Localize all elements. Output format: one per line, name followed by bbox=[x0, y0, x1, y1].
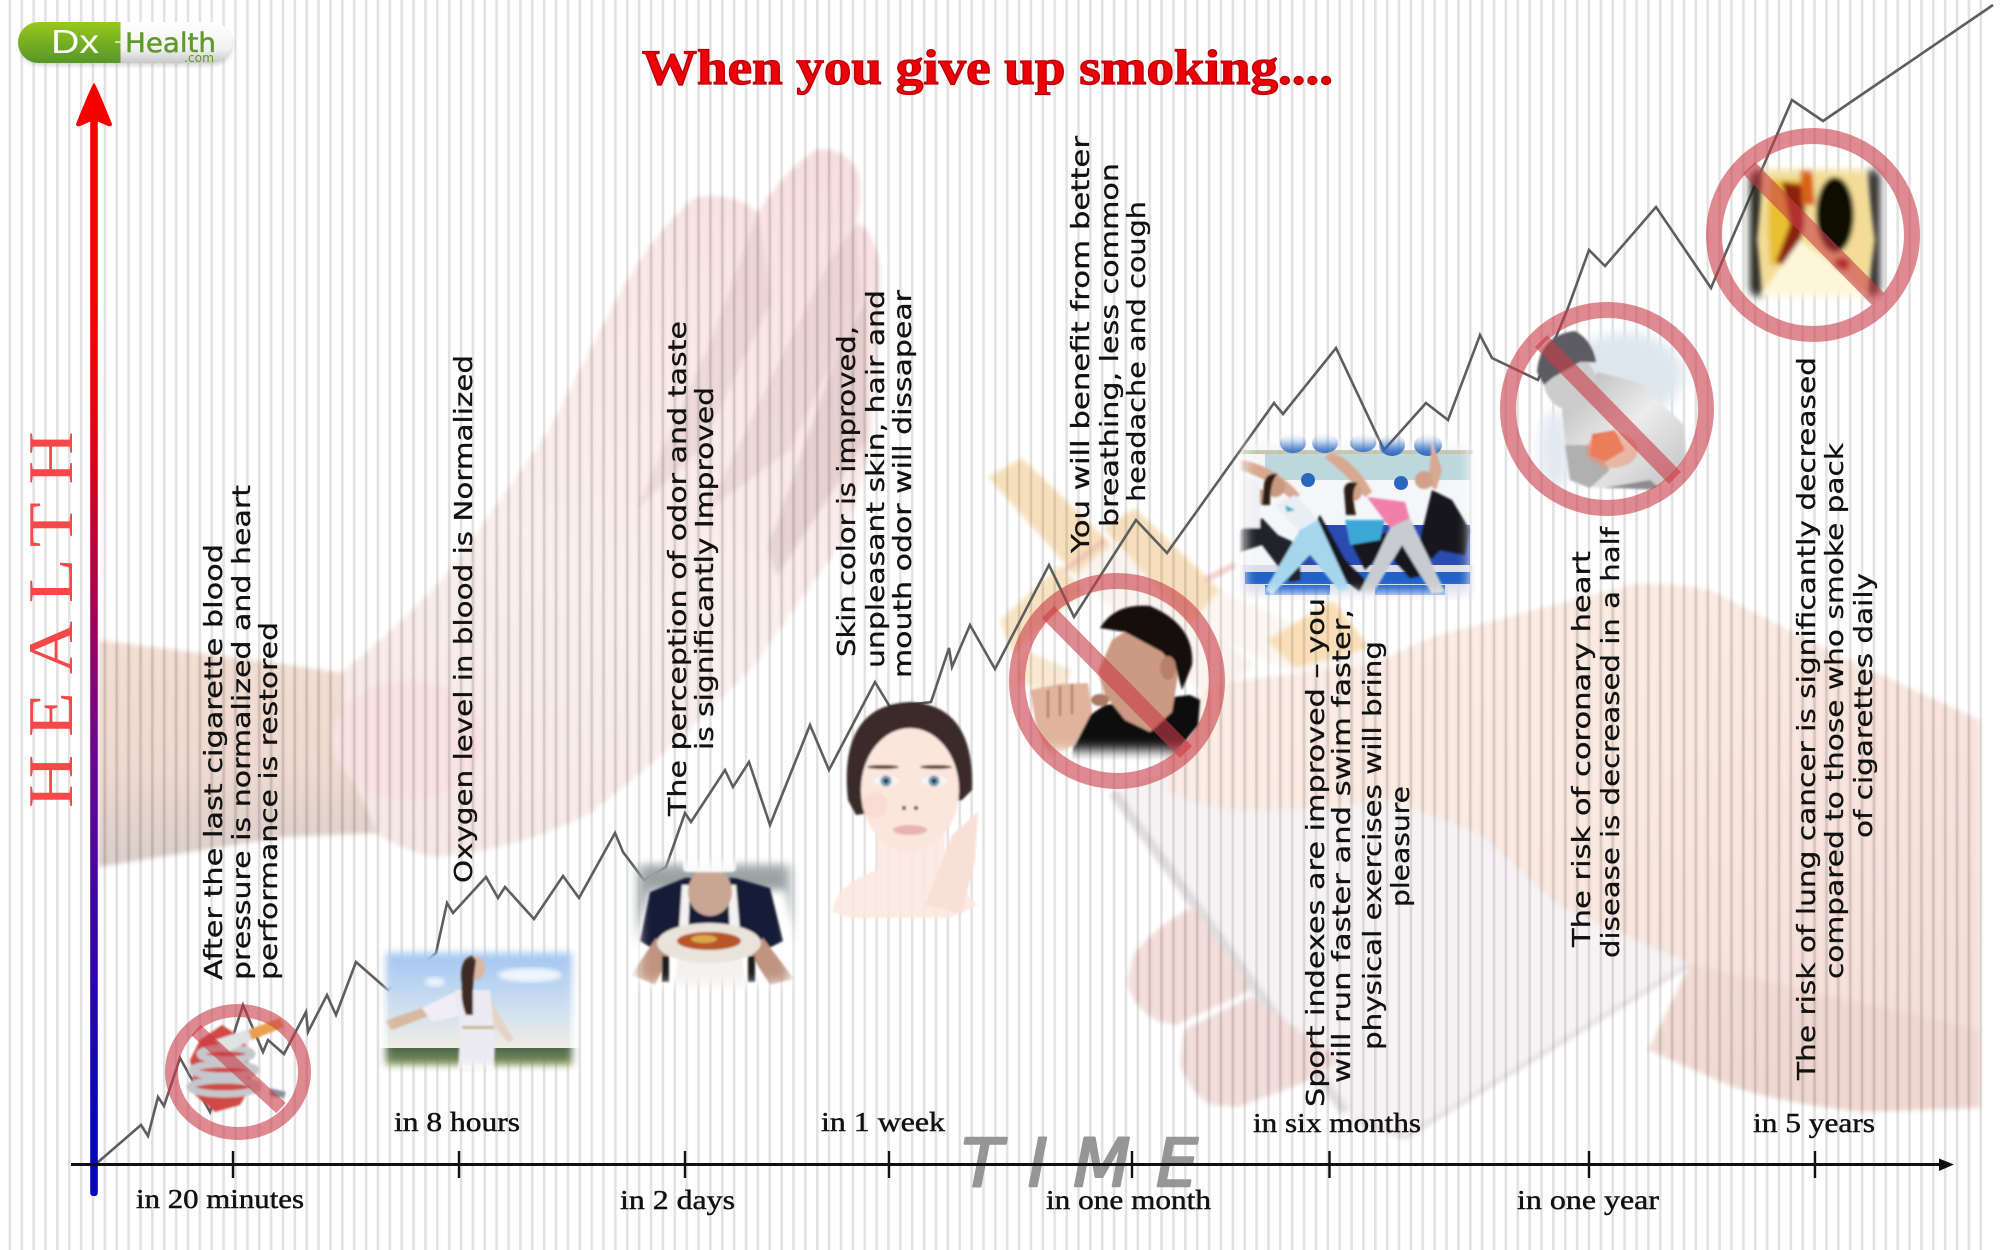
x-axis arrow with ticks bbox=[71, 1151, 1954, 1178]
text: in one year: The risk of coronary heart bbox=[1567, 551, 1596, 948]
text: in 5 years bbox=[1792, 357, 1878, 1081]
text: in six months: physical exercises will bring bbox=[1358, 641, 1387, 1050]
time labels: in 2 days bbox=[620, 1185, 735, 1215]
photo: group fitness class bbox=[1235, 435, 1474, 598]
text: in 2 days: is significantly Improved bbox=[690, 387, 719, 750]
time labels: in one month bbox=[1046, 1185, 1212, 1215]
background: hand holding cigarette pack bbox=[1113, 584, 1980, 1137]
time labels: in 1 week bbox=[821, 1107, 946, 1137]
text: in 5 years: The risk of lung cancer is significantly decreased bbox=[1792, 357, 1821, 1081]
photo: man coughing bbox=[1030, 606, 1200, 760]
text: in 8 hours: Oxygen level in blood is Normalized bbox=[449, 355, 478, 883]
text: in one month bbox=[1066, 135, 1151, 554]
photo: woman with healthy skin bbox=[832, 702, 978, 918]
text: in one month: You will benefit from better bbox=[1066, 135, 1095, 554]
logo: DxHealth: Health bbox=[125, 28, 216, 59]
time labels: in one year bbox=[1517, 1185, 1659, 1215]
photo: heart and lungs coiled by a cigarette bbox=[190, 1018, 286, 1112]
text: in 1 week: mouth odor will dissapear bbox=[888, 289, 917, 678]
background: crossed cigarettes bbox=[988, 458, 1375, 700]
y-axis label: HEALTH: HEALTH bbox=[15, 414, 86, 808]
text: in 1 week: Skin color is improved, bbox=[832, 326, 861, 657]
time labels: in 5 years bbox=[1753, 1108, 1875, 1138]
logo: DxHealth: .com bbox=[184, 51, 214, 65]
logo: DxHealth bbox=[18, 22, 232, 65]
text: in 20 minutes: After the last cigarette blood bbox=[199, 544, 228, 980]
text: in one month: headache and cough bbox=[1122, 201, 1151, 502]
text: in one month: breathing, less common bbox=[1095, 163, 1124, 527]
time labels: in six months bbox=[1253, 1108, 1421, 1138]
text: in six months: pleasure bbox=[1386, 786, 1415, 907]
text: in 1 week bbox=[832, 289, 917, 678]
prohibition ring: chest pain bbox=[1508, 310, 1706, 508]
text: in one year: disease is decreased in a half bbox=[1596, 526, 1625, 958]
text: in 5 years: of cigarettes daily bbox=[1849, 573, 1878, 838]
photo: diseased lungs x-ray bbox=[1744, 164, 1886, 302]
text: in 20 minutes: pressure is normalized and heart bbox=[227, 485, 256, 980]
time labels bbox=[136, 1107, 1875, 1215]
time labels: in 20 minutes bbox=[136, 1184, 304, 1214]
background: left hand bbox=[98, 149, 880, 867]
text: in six months bbox=[1301, 598, 1415, 1107]
prohibition ring: coughing bbox=[1017, 581, 1217, 781]
prohibition ring: heart bbox=[172, 1010, 304, 1134]
text: in 20 minutes bbox=[199, 485, 283, 980]
time labels: in 8 hours bbox=[394, 1107, 520, 1137]
title: When you give up smoking.... bbox=[642, 39, 1333, 95]
y-axis arrow: health bbox=[76, 83, 112, 1196]
text: in 20 minutes: performance is restored bbox=[254, 622, 283, 980]
text: in six months: will run faster and swim faster, bbox=[1327, 609, 1356, 1083]
text: in 2 days bbox=[663, 321, 719, 817]
text: in 2 days: The perception of odor and taste bbox=[663, 321, 692, 817]
prohibition ring: lungs bbox=[1714, 136, 1912, 334]
photo: chef smelling a dish bbox=[632, 855, 797, 987]
photo: man with chest pain bbox=[1536, 331, 1686, 490]
text: in six months: Sport indexes are improved – you bbox=[1301, 598, 1330, 1107]
logo: DxHealth: Dx bbox=[51, 23, 100, 60]
photo: woman breathing in a field bbox=[375, 945, 580, 1075]
x-axis label: TIME: TIME bbox=[962, 1125, 1198, 1202]
text: in 5 years: compared to those who smoke pack bbox=[1820, 442, 1849, 979]
text: in one year bbox=[1567, 526, 1625, 958]
text: in 1 week: unpleasant skin, hair and bbox=[861, 290, 890, 668]
